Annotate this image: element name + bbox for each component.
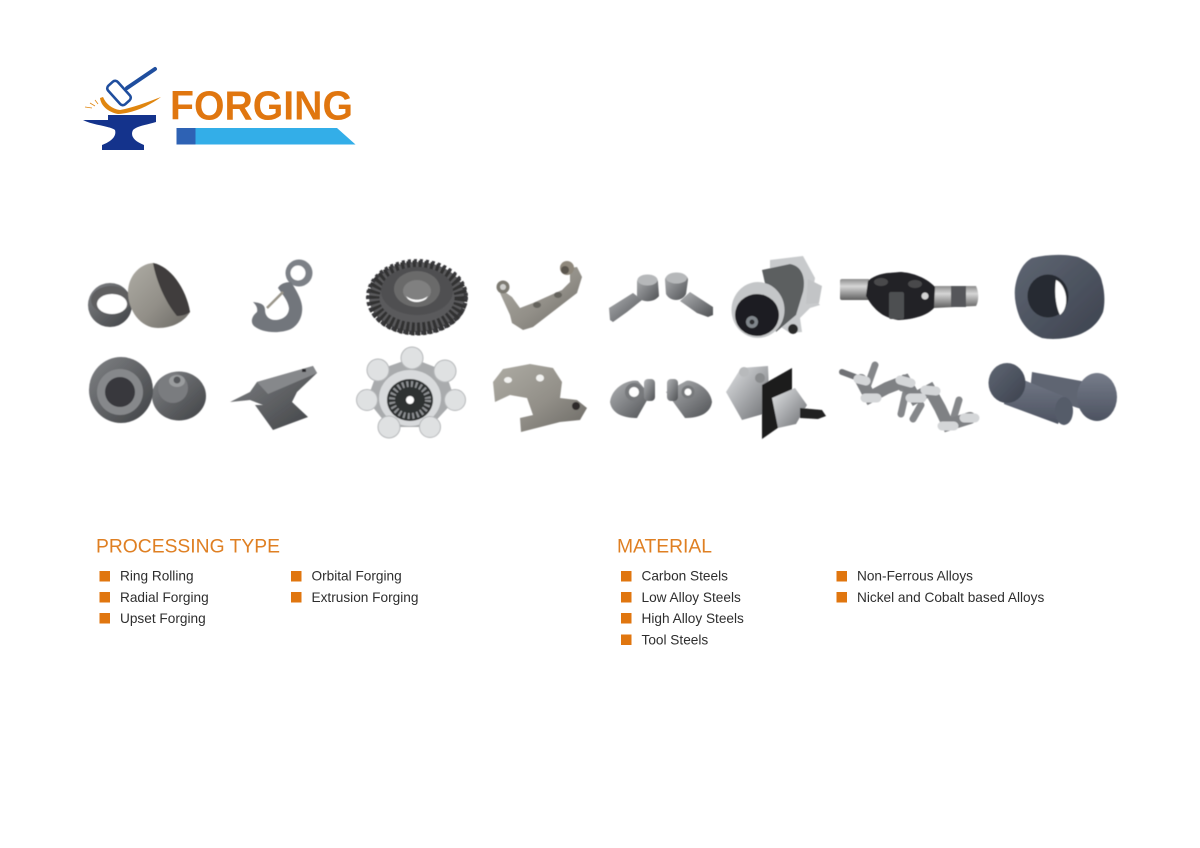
part: forged bracket arm (496, 261, 582, 330)
part: anvil (230, 366, 317, 430)
list: materials column 2: Non-Ferrous Alloys (857, 569, 973, 584)
part: universal joint (840, 272, 978, 320)
list: materials column 1: Tool Steels (642, 632, 708, 648)
icon: hammer (106, 69, 155, 107)
part: pair of brake cams (609, 272, 713, 322)
part: two flanged discs (89, 357, 206, 423)
heading: processing type: PROCESSING TYPE (96, 537, 280, 558)
part: crankshaft (842, 365, 975, 426)
panel: material (617, 537, 1044, 648)
list: processing types column 1: Radial Forging (120, 590, 209, 605)
part: two dumbbell billets (988, 363, 1117, 425)
list: processing types column 1: Ring Rolling (120, 569, 194, 584)
list: processing types column 1: Upset Forging (120, 611, 206, 626)
part: spiral bevel gear (368, 261, 466, 333)
heading: material: MATERIAL (617, 537, 712, 558)
part: valve with mounting plate (726, 366, 826, 439)
part: ring and hemisphere (88, 263, 190, 328)
part: alternator (732, 256, 822, 338)
icon: anvil (83, 115, 156, 150)
title underline bar (176, 128, 356, 144)
part: lifting hook (252, 260, 312, 332)
bolts (356, 347, 466, 438)
icon: bent orange workpiece (100, 97, 161, 114)
list: processing types column 2: Orbital Forging (312, 569, 402, 584)
list: materials column 2 (836, 569, 1044, 605)
list: processing types column 1 (100, 569, 209, 626)
list: processing types column 2: Extrusion Forging (312, 590, 418, 605)
icon: sparks (85, 100, 98, 108)
list: materials column 1 (621, 569, 744, 648)
part: clutch flange with bolts (356, 347, 466, 438)
part: forged hook plate (493, 364, 587, 432)
list: processing types column 2 (291, 569, 418, 605)
list: materials column 1: Low Alloy Steels (642, 590, 741, 605)
list: materials column 1: High Alloy Steels (642, 611, 744, 626)
logo: forging anvil and hammer (83, 69, 161, 150)
part: pair of cam discs (610, 379, 712, 418)
panel: processing type (96, 537, 418, 626)
list: materials column 1: Carbon Steels (642, 569, 728, 584)
part: thick steel ring (1015, 255, 1104, 339)
title: FORGING (170, 82, 353, 128)
list: materials column 2: Nickel and Cobalt based Alloys (857, 590, 1044, 605)
